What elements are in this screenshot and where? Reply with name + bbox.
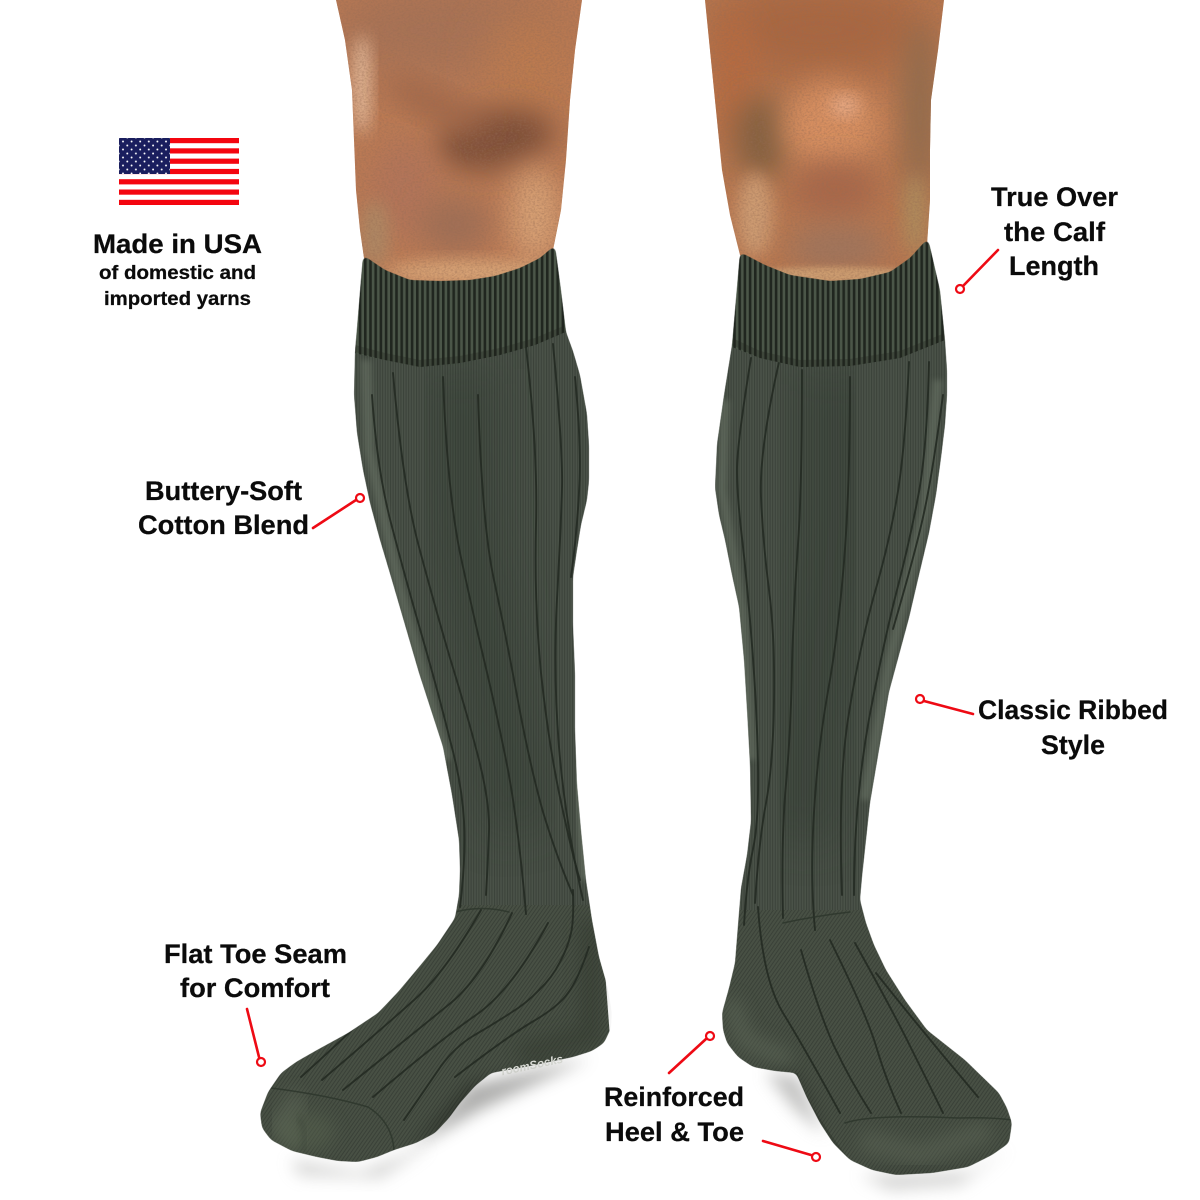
right sock ribs (737, 358, 978, 1113)
callout: Flat Toe Seam for Comfort (164, 939, 347, 1066)
flag stripes (119, 138, 239, 205)
callout: True Over the Calf Length (956, 182, 1118, 293)
right sock cuff (732, 242, 944, 367)
callout: Buttery-Soft Cotton Blend: Buttery-Soft (145, 476, 302, 506)
text: Made in USA: of domestic and (99, 263, 256, 284)
left sock brand logo: roomSocks (500, 1054, 564, 1078)
right sock shading (722, 370, 990, 1155)
callout: True Over the Calf Length: the Calf (1004, 217, 1105, 247)
flag: USA (119, 138, 239, 205)
foot shadows (290, 1058, 1010, 1190)
text: Made in USA: imported yarns (104, 289, 251, 310)
right toe and heel seams (783, 912, 1012, 1160)
left toe and heel seams (271, 908, 509, 1152)
left leg (250, 0, 620, 1170)
left sock cuff (355, 248, 566, 367)
right knee skin (705, 0, 944, 281)
text: Made in USA: Made in USA (93, 229, 262, 259)
callout: Flat Toe Seam for Comfort: Flat Toe Seam (164, 939, 347, 969)
callout: Classic Ribbed Style: Style (1041, 730, 1105, 760)
callout: Reinforced Heel and Toe: Heel & Toe (605, 1117, 744, 1147)
left sock shading (280, 360, 590, 1145)
right sock (700, 230, 1020, 1185)
callout: Classic Ribbed Style (916, 695, 1168, 760)
callout: True Over the Calf Length: Length (1009, 251, 1099, 281)
text: Made in USA (93, 229, 262, 310)
left sock ribs (301, 344, 589, 1120)
left knee skin (336, 0, 582, 282)
callout: True Over the Calf Length: True Over (991, 182, 1118, 212)
callout: Reinforced Heel and Toe: Reinforced (604, 1082, 744, 1112)
callout: Buttery-Soft Cotton Blend (138, 476, 364, 540)
callout: Classic Ribbed Style: Classic Ribbed (978, 695, 1168, 725)
left sock (250, 240, 620, 1170)
callout: Flat Toe Seam for Comfort: for Comfort (180, 973, 330, 1003)
flag canton (119, 138, 170, 174)
callout: Buttery-Soft Cotton Blend: Cotton Blend (138, 510, 309, 540)
right leg (700, 0, 1020, 1185)
callout: Reinforced Heel and Toe (604, 1032, 820, 1161)
